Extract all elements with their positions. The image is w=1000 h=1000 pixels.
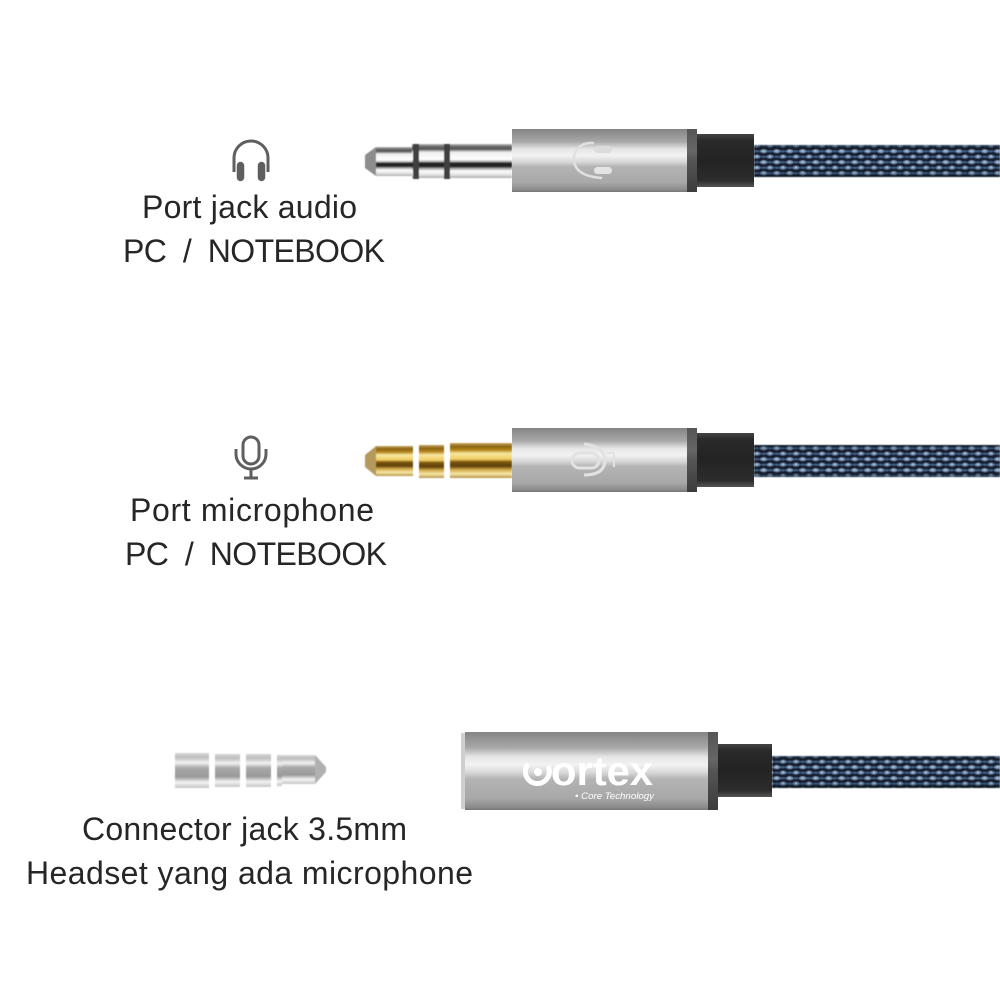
microphone jack connector — [365, 428, 1000, 492]
icon: headphones — [234, 141, 268, 181]
socket: braided cable — [772, 756, 1000, 788]
mic jack: aluminium housing — [512, 428, 687, 492]
socket: strain relief — [718, 744, 772, 797]
label: port microphone: Port microphone — [130, 492, 374, 528]
socket: collar — [708, 732, 718, 810]
headset socket connector — [461, 732, 1000, 810]
mic jack: braided cable — [754, 445, 1000, 477]
label: port microphone: PC / NOTEBOOK — [125, 536, 387, 572]
audio jack: metal pin — [365, 144, 512, 179]
mic jack: strain relief — [697, 433, 754, 487]
label: connector jack: Connector jack 3.5mm — [82, 811, 407, 847]
label: port microphone — [125, 492, 387, 572]
mic jack: embossed microphone icon — [572, 444, 614, 475]
audio jack: braided cable — [754, 145, 1000, 177]
label: port jack audio — [123, 189, 385, 269]
socket: end cap — [461, 733, 465, 809]
audio jack connector — [365, 129, 1000, 192]
illustration: 4-pole 3.5mm plug — [175, 753, 326, 788]
label: connector jack — [26, 811, 473, 891]
label: port jack audio: PC / NOTEBOOK — [123, 233, 385, 269]
mic jack: collar — [687, 428, 697, 492]
audio jack: embossed headset icon — [574, 143, 612, 178]
logo: Cortex Core Technology — [525, 748, 655, 801]
logo: Cortex Core Technology: ortex — [551, 748, 653, 794]
logo: Cortex Core Technology: • Core Technology — [575, 791, 655, 801]
socket: aluminium housing — [465, 732, 708, 810]
audio jack: aluminium housing — [512, 129, 687, 192]
audio jack: strain relief — [697, 134, 754, 187]
mic jack: gold pin — [365, 443, 512, 478]
icon: microphone — [236, 437, 266, 478]
label: port jack audio: Port jack audio — [142, 189, 357, 225]
audio jack: collar — [687, 129, 697, 192]
label: connector jack: Headset yang ada microphone — [26, 855, 473, 891]
